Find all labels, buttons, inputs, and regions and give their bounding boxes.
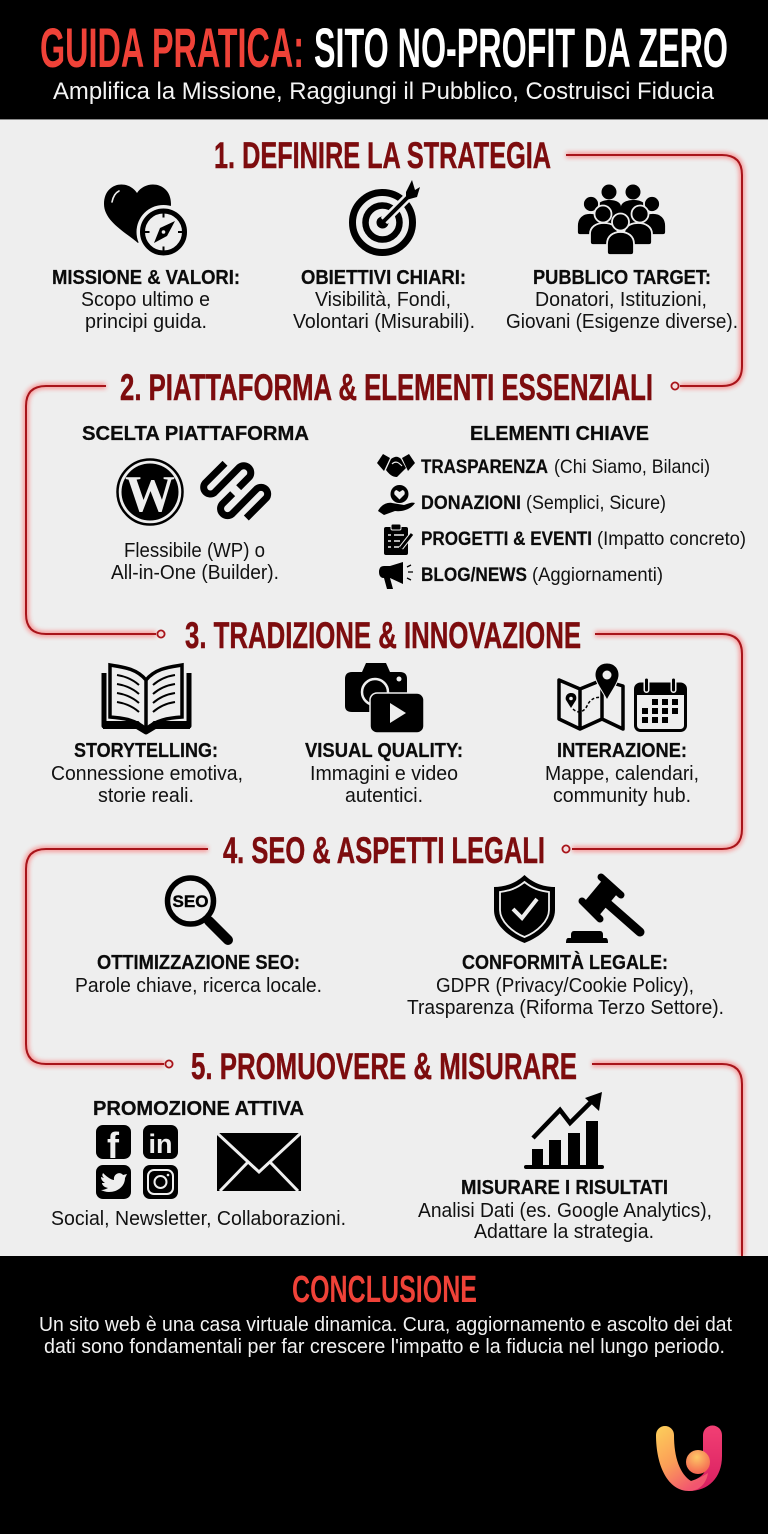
icon: growth chart (524, 1092, 604, 1169)
text: missione e valori: Scopo ultimo e (81, 288, 210, 311)
icon: gavel (566, 877, 640, 943)
text: conformita legale: GDPR (Privacy/Cookie Policy), (436, 974, 694, 997)
icon: linkedin (143, 1125, 178, 1159)
icon: calendar (636, 680, 686, 730)
heading 3: 3. TRADIZIONE & INNOVAZIONE (185, 615, 581, 656)
text: social newsletter collaborazioni: Social, Newsletter, Collaborazioni. (51, 1207, 346, 1230)
row: trasparenza: (Chi Siamo, Bilanci) (554, 456, 710, 478)
text: ottimizzazione seo: OTTIMIZZAZIONE SEO: (97, 952, 300, 974)
text: pubblico target (506, 267, 738, 333)
text: missione e valori: principi guida. (85, 310, 207, 333)
text: flessibile o all-in-one: All-in-One (Builder). (111, 561, 279, 584)
text: pubblico target: Giovani (Esigenze diverse). (506, 310, 738, 333)
title (40, 16, 728, 79)
text: visual quality (305, 740, 463, 807)
icon: handshake (377, 454, 415, 477)
conclusione text: dati sono fondamentali per far crescere l'impatto e la fiducia nel lungo periodo. (44, 1335, 725, 1358)
text: flessibile o all-in-one (111, 539, 279, 584)
heading 4: 4. SEO & ASPETTI LEGALI (223, 830, 545, 871)
text: missione e valori: MISSIONE & VALORI: (52, 267, 240, 289)
icon: camera and video (345, 663, 424, 733)
panel: 3 tradizione e innovazione (51, 615, 699, 807)
text: conformita legale (407, 951, 724, 1019)
text: obiettivi chiari: Volontari (Misurabili). (293, 310, 475, 333)
text: missione e valori (52, 267, 240, 333)
row: progetti ed eventi (421, 528, 746, 550)
icon: seo magnifier: SEO (173, 892, 208, 911)
row: trasparenza (421, 456, 710, 478)
row: progetti ed eventi: PROGETTI & EVENTI (421, 528, 592, 550)
subheading: scelta piattaforma: SCELTA PIATTAFORMA (82, 423, 309, 445)
icon: megaphone (379, 562, 413, 589)
icon: brand logo (656, 1426, 722, 1491)
icon: instagram (143, 1165, 178, 1199)
text: storytelling (51, 740, 243, 807)
row: blog e news: (Aggiornamenti) (532, 564, 663, 586)
text: obiettivi chiari (293, 267, 475, 333)
heading 1: 1. DEFINIRE LA STRATEGIA (214, 135, 551, 176)
icon: clipboard (384, 524, 412, 555)
text: obiettivi chiari: OBIETTIVI CHIARI: (301, 267, 466, 289)
icon: target with arrow (352, 180, 420, 252)
icon: facebook (96, 1125, 131, 1166)
text: ottimizzazione seo: Parole chiave, ricerca locale. (75, 974, 322, 997)
panel: conclusione (0, 1256, 768, 1534)
text: interazione (545, 740, 699, 807)
text: visual quality: Immagini e video (310, 762, 458, 785)
icon: squarespace logo (204, 463, 268, 518)
text: storytelling: Connessione emotiva, (51, 762, 243, 785)
text: misurare i risultati: Adattare la strategia. (474, 1220, 654, 1243)
header panel (0, 0, 768, 120)
icon: hand with heart (378, 485, 415, 515)
icon: group of people (577, 184, 666, 255)
icon: linkedin: in (148, 1129, 172, 1159)
text: obiettivi chiari: Visibilità, Fondi, (315, 288, 451, 311)
icon: twitter (96, 1165, 131, 1199)
subheading: elementi chiave: ELEMENTI CHIAVE (470, 423, 649, 445)
text: interazione: community hub. (553, 784, 691, 807)
panel: 1 definire la strategia (52, 135, 738, 333)
text: storytelling: storie reali. (98, 784, 194, 807)
icon: shield with check (494, 875, 555, 943)
icon: wordpress logo: W (125, 466, 175, 523)
connector lines (26, 155, 742, 1256)
text: interazione: INTERAZIONE: (557, 740, 687, 762)
conclusione text: Un sito web è una casa virtuale dinamica. Cura, aggiornamento e ascolto dei dat (39, 1313, 732, 1336)
text: storytelling: STORYTELLING: (74, 740, 218, 762)
row: donazioni: DONAZIONI (421, 492, 521, 514)
icon: facebook: f (107, 1125, 120, 1166)
text: visual quality: autentici. (345, 784, 423, 807)
text: visual quality: VISUAL QUALITY: (305, 740, 463, 762)
panel: 4 seo e aspetti legali (75, 830, 724, 1019)
subtitle: Amplifica la Missione, Raggiungi il Pubblico, Costruisci Fiducia (53, 78, 714, 105)
text: misurare i risultati: MISURARE I RISULTATI (461, 1177, 668, 1199)
text: ottimizzazione seo (75, 952, 322, 997)
row: blog e news: BLOG/NEWS (421, 564, 527, 586)
conclusione heading: CONCLUSIONE (292, 1269, 477, 1311)
text: conformita legale: CONFORMITÀ LEGALE: (462, 951, 668, 974)
text: interazione: Mappe, calendari, (545, 762, 699, 785)
panel: 2 piattaforma ed elementi essenziali (82, 367, 746, 589)
icon: heart and compass (104, 184, 190, 259)
text: misurare i risultati: Analisi Dati (es. Google Analytics), (418, 1199, 712, 1222)
row: donazioni: (Semplici, Sicure) (526, 492, 666, 514)
heading 5: 5. PROMUOVERE & MISURARE (191, 1046, 577, 1087)
conclusione text (39, 1313, 732, 1358)
icon: open book (104, 665, 189, 732)
icon: seo magnifier (168, 878, 228, 940)
panel: 5 promuovere e misurare (51, 1046, 712, 1243)
subheading: promozione attiva: PROMOZIONE ATTIVA (93, 1098, 304, 1120)
text: pubblico target: Donatori, Istituzioni, (535, 288, 707, 311)
row: donazioni (421, 492, 666, 514)
row: blog e news (421, 564, 663, 586)
icon: envelope (217, 1133, 301, 1191)
icon: map with pin (559, 663, 623, 729)
title: GUIDA PRATICA: (40, 16, 304, 79)
text: pubblico target: PUBBLICO TARGET: (533, 267, 711, 289)
row: trasparenza: TRASPARENZA (421, 456, 548, 478)
text: misurare i risultati (418, 1177, 712, 1243)
text: conformita legale: Trasparenza (Riforma Terzo Settore). (407, 996, 724, 1019)
row: progetti ed eventi: (Impatto concreto) (597, 528, 746, 550)
text: flessibile o all-in-one: Flessibile (WP) o (124, 539, 265, 562)
